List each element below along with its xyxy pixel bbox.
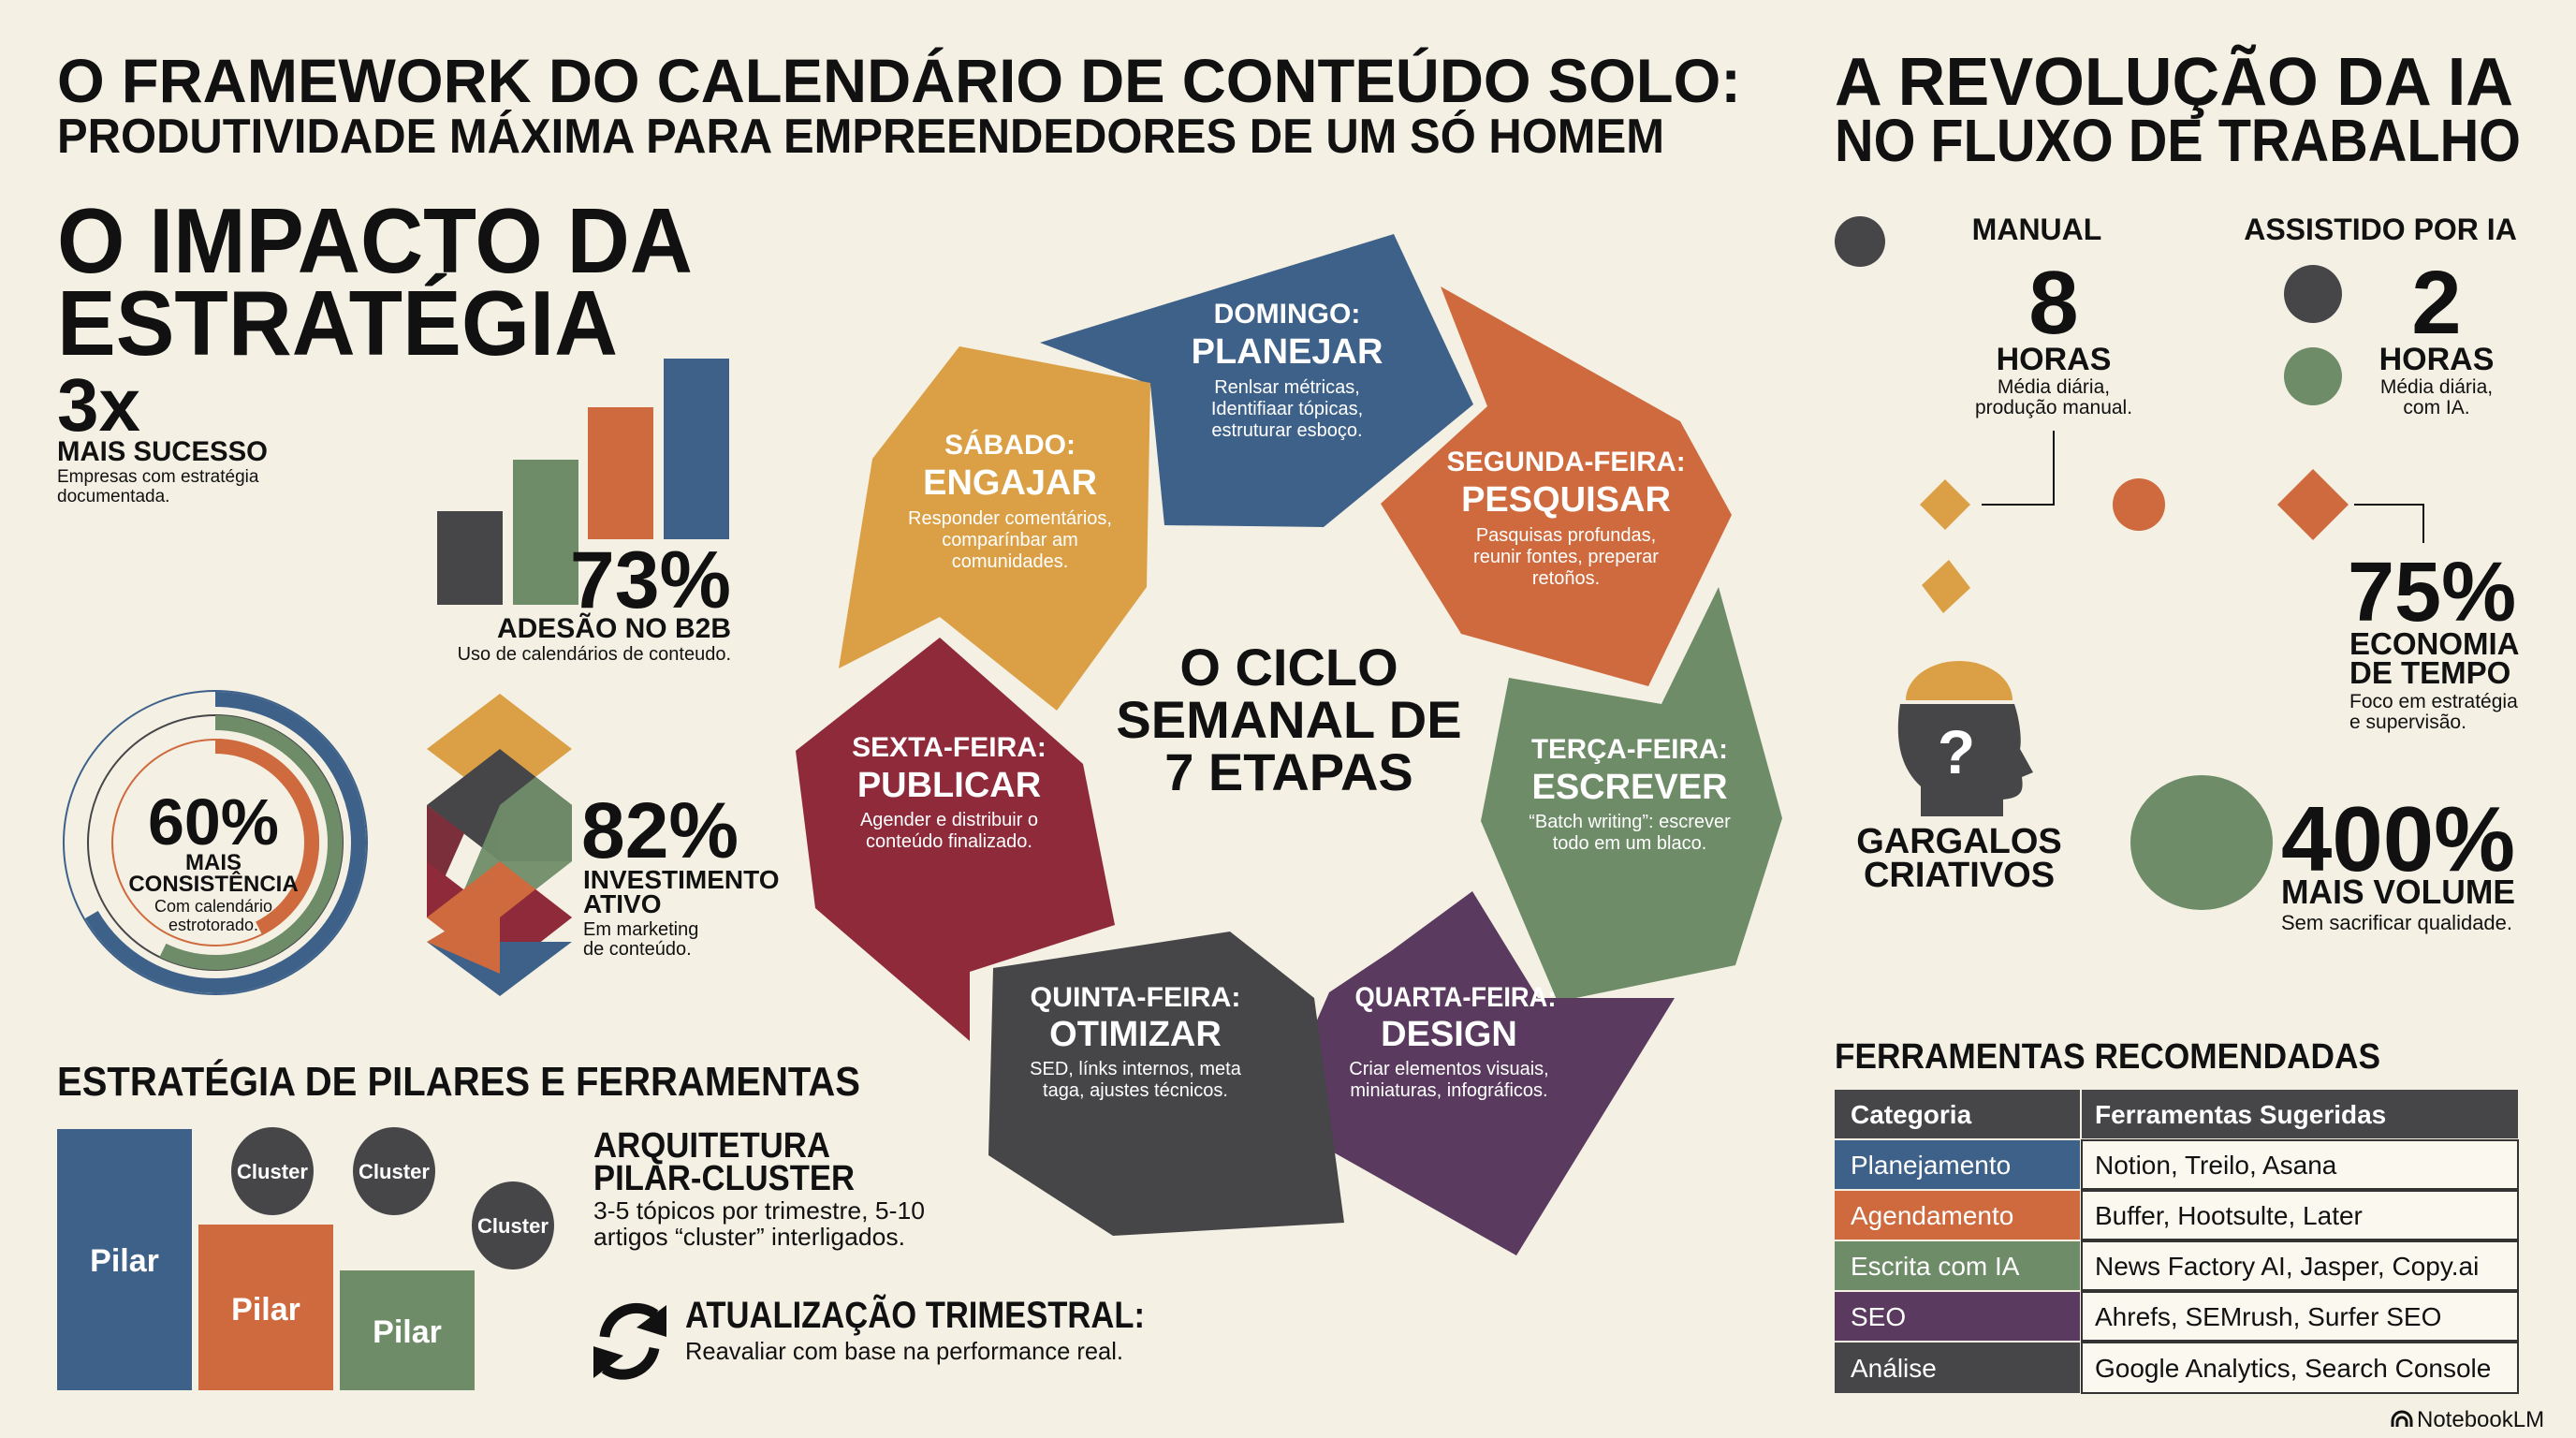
heading: pillars: ESTRATÉGIA DE PILARES E FERRAMENTAS [57,1058,860,1105]
row: escrita [1835,1241,2518,1290]
row: planejamento [1835,1140,2518,1189]
pillar chart: Pilar [231,1292,300,1328]
text: quarterly update: ATUALIZAÇÃO TRIMESTRAL: [685,1293,1145,1336]
step: quarta: DESIGN [1381,1015,1517,1054]
stat: 73%: Uso de calendários de conteudo. [458,644,731,665]
icon: head with question [1898,661,2033,816]
connector: manual [1920,431,2165,613]
cycle center label: O CICLO [1179,638,1398,697]
stat: 400%: MAIS VOLUME [2281,873,2515,911]
stat: 73% [458,536,731,665]
step: quarta: Criar elementos visuais, [1349,1059,1549,1079]
stat: 73%: 73% [570,536,731,625]
icon: head with question: ? [1938,717,1975,786]
stat: 75%: 75% [2348,546,2516,639]
comparison: manual vs ai: com IA. [2403,397,2470,418]
row: seo: SEO [1851,1302,1906,1331]
icon: refresh [593,1305,666,1378]
step: domingo: DOMINGO: [1214,299,1360,330]
row: seo [1835,1292,2518,1341]
stat: 82%: INVESTIMENTO [583,865,780,894]
stat: 3x: MAIS SUCESSO [57,436,268,467]
step: terca [1481,587,1782,1002]
stat: 75%: Foco em estratégia [2349,691,2518,712]
comparison: manual vs ai [1835,213,2517,418]
pillar chart: Cluster [477,1214,549,1238]
step: quinta: SED, línks internos, meta [1030,1059,1242,1079]
text: architecture: ARQUITETURA [593,1126,830,1166]
stat: 75%: e supervisão. [2349,712,2466,733]
label: bottlenecks: GARGALOS [1856,822,2062,861]
title: O FRAMEWORK DO CALENDÁRIO DE CONTEÚDO SOLO: [57,46,1741,115]
heading: impact: ESTRATÉGIA [57,271,618,374]
step: segunda: PESQUISAR [1461,480,1671,520]
comparison: manual vs ai: HORAS [1997,342,2111,377]
stat: 3x: 3x [57,363,140,447]
ring chart: 60% [64,691,367,994]
step: terca: todo em um blaco. [1553,833,1706,854]
step: sabado [839,346,1150,711]
text: quarterly update [685,1293,1145,1365]
title: AI revolution: NO FLUXO DE TRABALHO [1835,107,2521,174]
row: seo: Ahrefs, SEMrush, Surfer SEO [2095,1302,2441,1331]
comparison: manual vs ai: Média diária, [2380,376,2493,398]
cycle center label [1116,638,1462,801]
step: domingo: Identifiaar tópicas, [1211,399,1363,419]
step: sexta: conteúdo finalizado. [866,831,1032,852]
heading: tools: FERRAMENTAS RECOMENDADAS [1835,1037,2380,1077]
stat: 3x: Empresas com estratégia [57,467,259,487]
comparison: manual vs ai: HORAS [2379,342,2494,377]
comparison: manual vs ai: 2 [2411,253,2462,353]
comparison: manual vs ai: ASSISTIDO POR IA [2244,213,2517,246]
step: segunda: retoños. [1532,568,1600,589]
text: architecture: 3-5 tópicos por trimestre, 5-10 [593,1196,925,1225]
step: sexta [796,638,1115,1041]
row: analise [1835,1343,2518,1393]
row: escrita: News Factory AI, Jasper, Copy.ai [2095,1252,2479,1281]
comparison: manual vs ai: 8 [2028,253,2079,353]
step: sabado: SÁBADO: [944,429,1076,461]
text: architecture: artigos “cluster” interligados. [593,1223,905,1251]
title: AI revolution: A REVOLUÇÃO DA IA [1835,44,2513,120]
pillar chart [57,1127,554,1390]
step: quinta: QUINTA-FEIRA: [1030,982,1241,1013]
step: sabado: comparínbar am [942,530,1078,550]
step: domingo: Renlsar métricas, [1214,377,1360,398]
step: quinta [988,932,1344,1236]
step: segunda: SEGUNDA-FEIRA: [1447,447,1685,477]
ring chart: 60%: Com calendário [154,897,272,916]
step: domingo: estruturar esboço. [1211,420,1363,441]
heading: impact [57,189,693,374]
step: domingo: PLANEJAR [1192,332,1383,372]
pillar chart: Cluster [237,1160,308,1183]
step: sabado: Responder comentários, [908,508,1112,529]
stat: 82%: de conteúdo. [583,939,692,960]
logo: NotebookLM: NotebookLM [2417,1407,2544,1432]
step: sexta: PUBLICAR [857,766,1041,805]
step: terca: “Batch writing”: escrever [1529,812,1731,832]
bar chart [437,359,729,605]
stat: 82%: Em marketing [583,919,698,940]
step: sabado: comunidades. [952,551,1068,572]
row: analise: Análise [1851,1354,1937,1383]
text: architecture [593,1126,925,1251]
ring chart: 60%: CONSISTÊNCIA [128,871,299,897]
stat: 3x: documentada. [57,487,169,506]
step: segunda: reunir fontes, preperar [1473,547,1659,567]
title: PRODUTIVIDADE MÁXIMA PARA EMPREENDEDORES DE UM SÓ HOMEM [57,110,1664,164]
icon: green circle [2130,775,2273,910]
step: quinta: OTIMIZAR [1049,1015,1222,1054]
stat: 3x [57,363,268,506]
row: agendamento [1835,1191,2518,1240]
ring chart: 60%: estrotorado. [168,916,258,934]
stat: 75%: ECONOMIA [2349,626,2520,661]
row: planejamento: Planejamento [1851,1151,2011,1180]
table header: Categoria [1851,1100,1972,1129]
row: agendamento: Agendamento [1851,1201,2013,1230]
text: quarterly update: Reavaliar com base na performance real. [685,1337,1123,1365]
step: segunda [1381,286,1732,686]
step: sexta: Agender e distribuir o [860,810,1038,830]
comparison: manual vs ai: Média diária, [1998,376,2110,398]
step: quarta: miniaturas, infográficos. [1350,1080,1548,1101]
stat: 82% [581,786,780,960]
cycle center label: 7 ETAPAS [1164,742,1413,801]
pillar chart: Pilar [373,1314,442,1350]
table header [1835,1090,2518,1138]
tools table [1835,1090,2518,1393]
stat: 400%: 400% [2281,787,2515,890]
step: sabado: ENGAJAR [923,463,1097,503]
comparison: manual vs ai: MANUAL [1972,213,2101,246]
step: sexta: SEXTA-FEIRA: [852,732,1046,763]
ring chart: 60%: MAIS [185,850,242,875]
step: quarta [1274,891,1675,1255]
comparison: manual vs ai: produção manual. [1975,397,2132,418]
stat: 400% [2281,787,2515,934]
cycle center label: SEMANAL DE [1116,690,1462,749]
step: quinta: taga, ajustes técnicos. [1043,1080,1228,1101]
label: bottlenecks [1856,822,2062,895]
step: segunda: Pasquisas profundas, [1476,525,1656,546]
row: escrita: Escrita com IA [1851,1252,2020,1281]
step: domingo [1040,234,1473,527]
label: bottlenecks: CRIATIVOS [1864,856,2055,895]
ring chart: 60%: 60% [148,785,279,858]
stat: 82%: ATIVO [583,889,661,918]
row: agendamento: Buffer, Hootsulte, Later [2095,1201,2363,1230]
stat: 400%: Sem sacrificar qualidade. [2281,911,2512,934]
step: terca: ESCREVER [1531,768,1728,807]
row: analise: Google Analytics, Search Console [2095,1354,2491,1383]
pillar chart: Pilar [90,1243,159,1279]
title [57,46,1741,164]
stat: 73%: ADESÃO NO B2B [497,612,731,644]
table header: Ferramentas Sugeridas [2095,1100,2386,1129]
connector: time saving [2277,469,2423,543]
step: terca: TERÇA-FEIRA: [1531,734,1728,765]
title: AI revolution [1835,44,2521,174]
stat: 75% [2348,546,2520,733]
stat: 82%: 82% [581,786,739,874]
stat: 75%: DE TEMPO [2349,655,2510,690]
row: planejamento: Notion, Treilo, Asana [2095,1151,2337,1180]
pillar chart: Cluster [359,1160,430,1183]
cycle diagram [796,234,1782,1255]
text: architecture: PILAR-CLUSTER [593,1159,855,1198]
step: quarta: QUARTA-FEIRA: [1355,982,1556,1013]
icon: layered diamonds [427,694,572,996]
heading: impact: O IMPACTO DA [57,189,693,292]
